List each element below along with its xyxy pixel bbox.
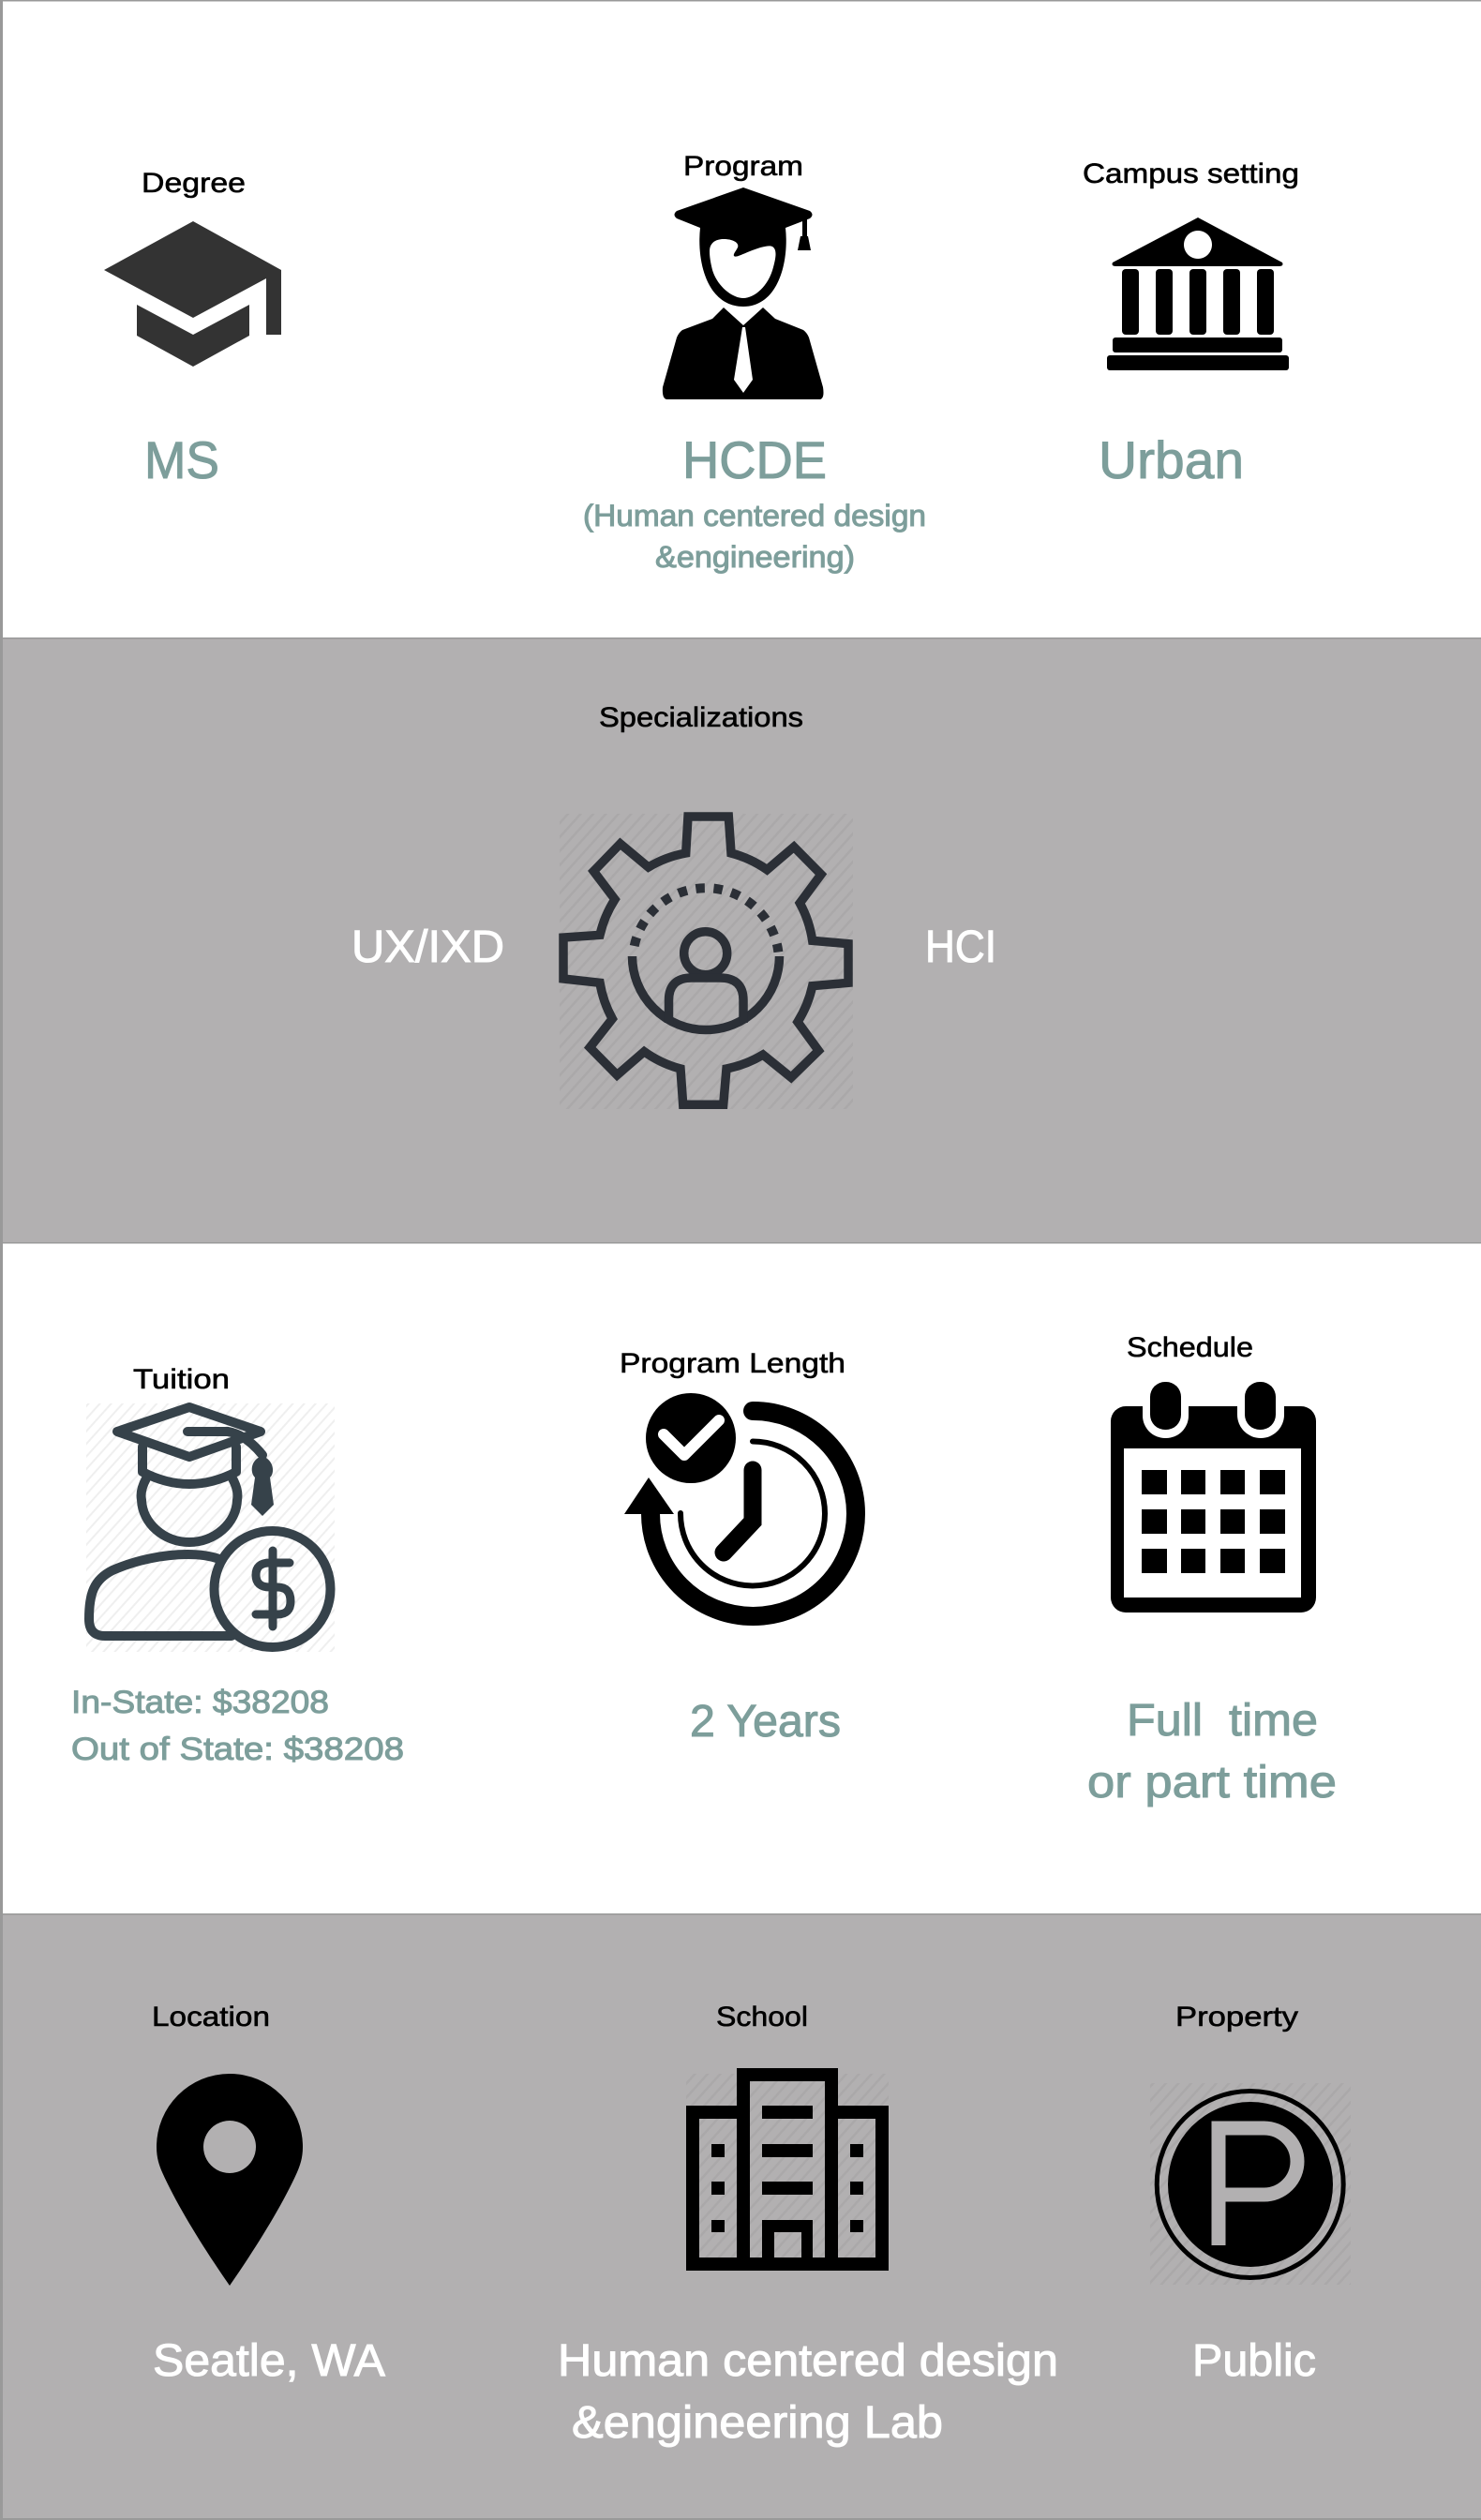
heading: Location: Location <box>152 2002 270 2032</box>
heading: Property: Property <box>1175 2002 1298 2032</box>
heading: Specializations: Specializations <box>599 702 803 733</box>
panel: degree, program and campus <box>0 0 1481 638</box>
value: Urban: Urban <box>1099 430 1244 489</box>
icon: school building <box>686 2068 889 2271</box>
icon: P in circle <box>1150 2083 1351 2285</box>
value: school name line two: &engineering Lab <box>572 2398 943 2448</box>
panel: specializations <box>0 638 1481 1242</box>
value: HCDE: HCDE <box>682 430 827 489</box>
heading: Program: Program <box>683 151 803 182</box>
value: school name line one: Human centered design <box>558 2336 1058 2386</box>
heading: Degree: Degree <box>142 168 246 199</box>
value: Seatle, WA: Seatle, WA <box>153 2336 385 2386</box>
heading: Program Length: Program Length <box>620 1348 845 1379</box>
value: MS: MS <box>144 430 219 489</box>
icon: map pin <box>157 2074 303 2286</box>
panel: tuition, length and schedule <box>0 1242 1481 1914</box>
icon: clock with check <box>624 1393 856 1616</box>
heading: Campus setting: Campus setting <box>1083 158 1299 189</box>
icon: mortarboard <box>104 221 281 367</box>
value: in-state tuition: In-State: $38208 <box>71 1685 329 1720</box>
value: out-of-state tuition: Out of State: $38208 <box>71 1732 404 1767</box>
description: Human centered design: (Human centered design <box>583 499 926 532</box>
panel: location, school and property <box>0 1913 1481 2520</box>
description: engineering: &engineering) <box>655 540 855 574</box>
icon: calendar <box>1111 1378 1316 1612</box>
specialization: UX/IXD: UX/IXD <box>352 922 504 972</box>
value: or part time: or part time <box>1087 1758 1337 1808</box>
icon: campus building <box>1107 218 1289 370</box>
icon: graduate in suit <box>663 188 823 399</box>
icon: gear with person <box>560 814 853 1109</box>
specialization: HCI: HCI <box>925 922 996 972</box>
heading: School: School <box>716 2002 808 2032</box>
value: 2 Years: 2 Years <box>690 1697 841 1747</box>
heading: Tuition: Tuition <box>133 1364 230 1395</box>
icon: graduate with dollar coin <box>86 1403 335 1652</box>
value: Public: Public <box>1192 2336 1316 2386</box>
heading: Schedule: Schedule <box>1127 1332 1253 1363</box>
value: full time: Full time <box>1127 1696 1318 1746</box>
